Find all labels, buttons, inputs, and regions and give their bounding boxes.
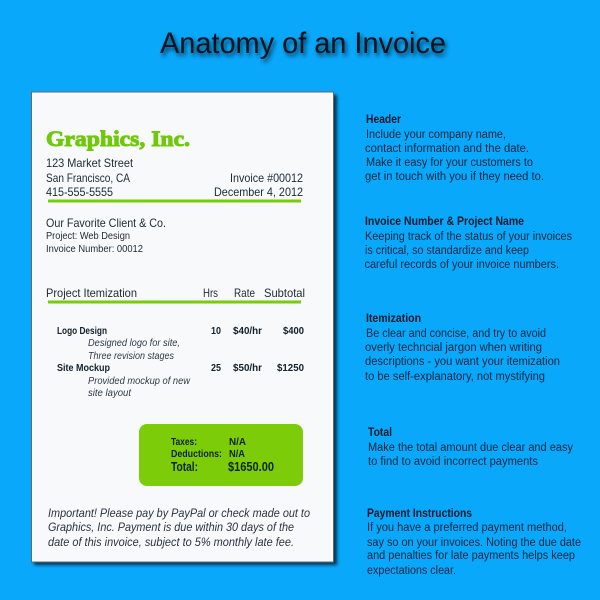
- itemization header: Hrs: [203, 286, 218, 300]
- invoice header: Graphics, Inc.: [46, 126, 190, 151]
- text block: itemization notes: to be self-explanatory, not mystifying: [365, 371, 545, 383]
- line items: $1250: [277, 362, 304, 374]
- invoice header: [46, 126, 303, 202]
- text block: payment instructions notes: say so on your invoices. Noting the due date: [367, 537, 581, 549]
- payment note: [48, 506, 310, 549]
- invoice header: 415-555-5555: [46, 185, 113, 199]
- line items: Three revision stages: [88, 350, 175, 362]
- text block: header notes: get in touch with you if they need to.: [365, 171, 544, 183]
- title: Anatomy of an Invoice: [160, 27, 446, 60]
- text block: itemization notes: overly techncial jargon when writing: [365, 342, 542, 354]
- text block: invoice number notes: is critical, so standardize and keep: [365, 245, 529, 257]
- text block: payment instructions notes: [367, 508, 581, 577]
- total box: N/A: [229, 448, 245, 460]
- line items: 25: [211, 362, 221, 374]
- text block: total notes: Total: [368, 427, 392, 439]
- line items: Provided mockup of new: [88, 375, 191, 387]
- client details: [46, 216, 166, 255]
- text block: payment instructions notes: If you have a preferred payment method,: [367, 522, 567, 534]
- payment note: date of this invoice, subject to 5% monthly late fee.: [48, 535, 294, 549]
- panel: invoice paper: [32, 92, 337, 565]
- total box: Deductions:: [171, 448, 222, 460]
- invoice header: San Francisco, CA: [46, 171, 130, 185]
- text block: header notes: Make it easy for your customers to: [366, 157, 533, 169]
- client details: Invoice Number: 00012: [46, 244, 143, 255]
- title: Anatomy of an Invoice: [162, 30, 448, 63]
- invoice header: Invoice #00012: [230, 171, 303, 185]
- line items: Logo Design: [57, 325, 107, 337]
- itemization header: Subtotal: [264, 286, 305, 300]
- text block: total notes: Make the total amount due clear and easy: [368, 442, 573, 454]
- total box: Total:: [171, 459, 198, 474]
- text block: itemization notes: descriptions - you want your itemization: [365, 356, 560, 368]
- text block: invoice number notes: Keeping track of the status of your invoices: [365, 231, 572, 243]
- line items: [57, 325, 304, 399]
- text block: payment instructions notes: and penalties for late payments helps keep: [367, 550, 575, 562]
- text block: itemization notes: [365, 313, 560, 383]
- client details: Project: Web Design: [46, 231, 130, 242]
- invoice header: December 4, 2012: [214, 185, 303, 199]
- total box: [139, 424, 303, 486]
- line items: Site Mockup: [57, 362, 110, 374]
- text block: total notes: to find to avoid incorrect payments: [368, 456, 538, 468]
- line items: site layout: [88, 387, 132, 399]
- payment note: Graphics, Inc. Payment is due within 30 days of the: [48, 520, 294, 534]
- text block: header notes: Include your company name,: [366, 129, 506, 141]
- text block: header notes: Header: [366, 114, 401, 126]
- text block: total notes: [368, 427, 573, 468]
- text block: invoice number notes: careful records of your invoice numbers.: [364, 259, 559, 271]
- total box: Taxes:: [171, 436, 197, 448]
- line items: $50/hr: [233, 362, 262, 374]
- payment note: Important! Please pay by PayPal or check made out to: [48, 506, 310, 520]
- line items: $400: [283, 325, 304, 337]
- text block: header notes: contact information and the date.: [365, 143, 529, 155]
- line items: Designed logo for site,: [88, 337, 180, 349]
- text block: payment instructions notes: expectations clear.: [367, 565, 456, 577]
- client details: Our Favorite Client & Co.: [46, 216, 166, 230]
- text block: invoice number notes: [364, 216, 572, 271]
- itemization header: Project Itemization: [46, 286, 137, 300]
- text block: itemization notes: Itemization: [366, 313, 421, 325]
- text block: payment instructions notes: Payment Instructions: [367, 508, 472, 520]
- text block: itemization notes: Be clear and concise, and try to avoid: [366, 328, 546, 340]
- line items: 10: [211, 325, 221, 337]
- itemization header: [46, 286, 305, 304]
- total box: $1650.00: [228, 459, 274, 474]
- invoice header: 123 Market Street: [46, 156, 134, 170]
- itemization header: Rate: [234, 286, 255, 300]
- text block: invoice number notes: Invoice Number & Project Name: [365, 216, 524, 228]
- text block: header notes: [365, 114, 544, 183]
- total box: N/A: [229, 436, 246, 448]
- line items: $40/hr: [233, 325, 262, 337]
